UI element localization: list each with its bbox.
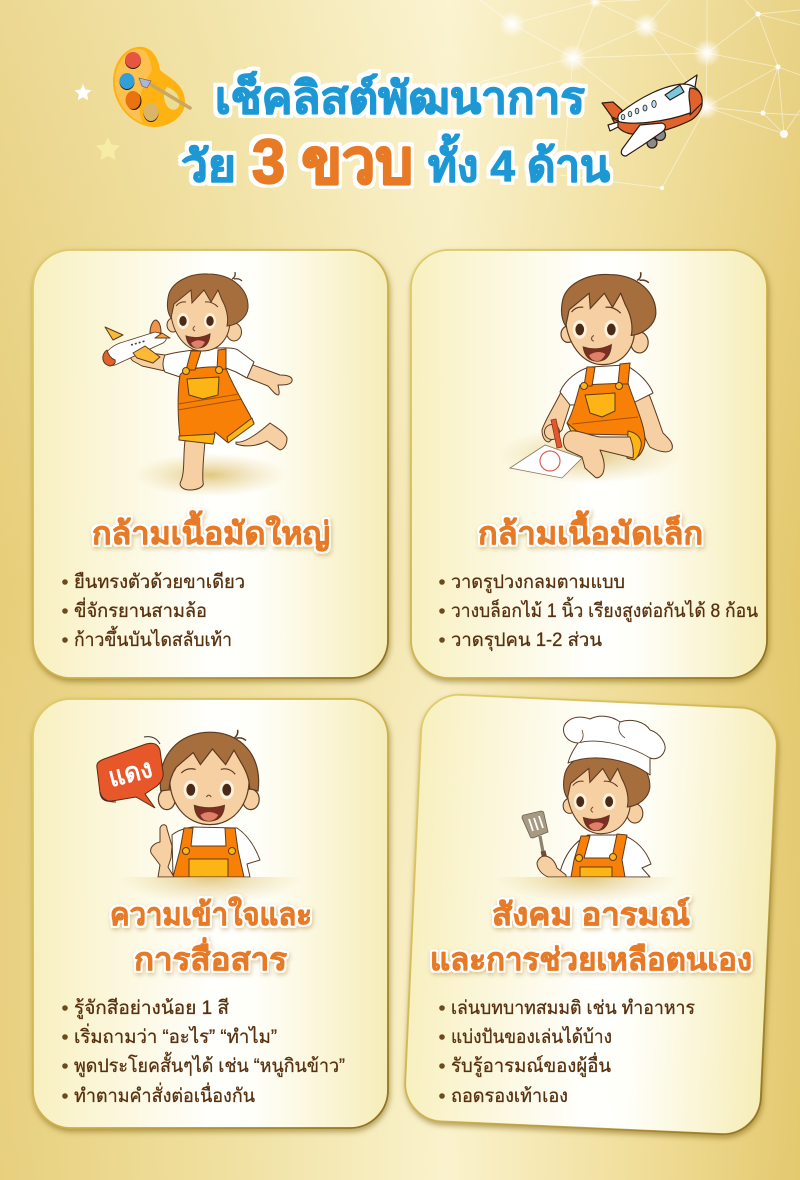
heading: กล้ามเนื้อมัดใหญ่ (92, 510, 330, 552)
card background (411, 250, 767, 678)
heading: ความเข้าใจและ (110, 896, 312, 932)
bullet list: รู้จักสีอย่างน้อย 1 สี (74, 997, 229, 1019)
bullet list: ขี่จักรยานสามล้อ (74, 597, 207, 622)
network decoration (480, 0, 800, 190)
panel: comprehension and communication: การสื่อสาร (134, 937, 287, 977)
bullet list: ทำตามคำสั่งต่อเนื่องกัน (74, 1082, 255, 1107)
tilted card background (403, 693, 779, 1136)
icon: airplane (602, 75, 702, 156)
card background (33, 250, 388, 678)
bullet list (62, 997, 345, 1107)
illustration: boy with speech bubble (97, 730, 302, 905)
title (181, 71, 610, 197)
bullet list: เริ่มถามว่า “อะไร” “ทำไม” (74, 1023, 277, 1048)
spatula (522, 811, 566, 877)
icon: speech bubble: แดง (105, 753, 155, 793)
bullet list: ก้าวขึ้นบันไดสลับเท้า (74, 626, 232, 651)
bullet list: แบ่งปันของเล่นได้บ้าง (451, 1026, 612, 1048)
icon: speech bubble (97, 737, 163, 808)
bullet list: พูดประโยคสั้นๆได้ เช่น “หนูกินข้าว” (74, 1052, 345, 1077)
bullet list (439, 998, 695, 1107)
bullet list: วาดรุปคน 1-2 ส่วน (451, 630, 602, 652)
bullet list: ถอดรองเท้าเอง (451, 1086, 568, 1107)
panel: gross motor (33, 250, 388, 678)
bullet list: เล่นบทบาทสมมติ เช่น ทำอาหาร (451, 998, 695, 1019)
panel: comprehension and communication (33, 699, 388, 1128)
illustration: boy holding toy plane (103, 272, 292, 497)
heading: กล้ามเนื้อมัดเล็ก (478, 510, 703, 551)
illustration: chef boy with spatula (505, 716, 670, 902)
bullet list: ยืนทรงตัวด้วยขาเดียว (74, 571, 245, 593)
bullet list: รับรู้อารมณ์ของผู้อื่น (451, 1052, 611, 1077)
panel: fine motor (411, 250, 767, 678)
bullet list: วาดรูปวงกลมตามแบบ (451, 572, 625, 593)
star decorations (74, 84, 120, 160)
title: 3 ขวบ (252, 128, 413, 197)
bullet list (62, 571, 245, 651)
illustration: boy drawing (498, 272, 682, 484)
title: เช็คลิสต์พัฒนาการ (215, 71, 585, 123)
icon: paint palette (113, 47, 190, 127)
title: วัย (181, 142, 236, 191)
panel: social, emotion and self-help (403, 693, 779, 1136)
card background (33, 699, 388, 1128)
heading: สังคม อารมณ์ (492, 897, 690, 932)
title: ทั้ง 4 ด้าน (428, 133, 610, 191)
panel: social, emotion and self-help: และการช่วยเหลือตนเอง (430, 942, 752, 977)
bullet list: วางบล็อกไม้ 1 นิ้ว เรียงสูงต่อกันได้ 8 ก้อน (451, 597, 758, 622)
chef hat (563, 716, 665, 775)
bullet list (439, 572, 758, 652)
